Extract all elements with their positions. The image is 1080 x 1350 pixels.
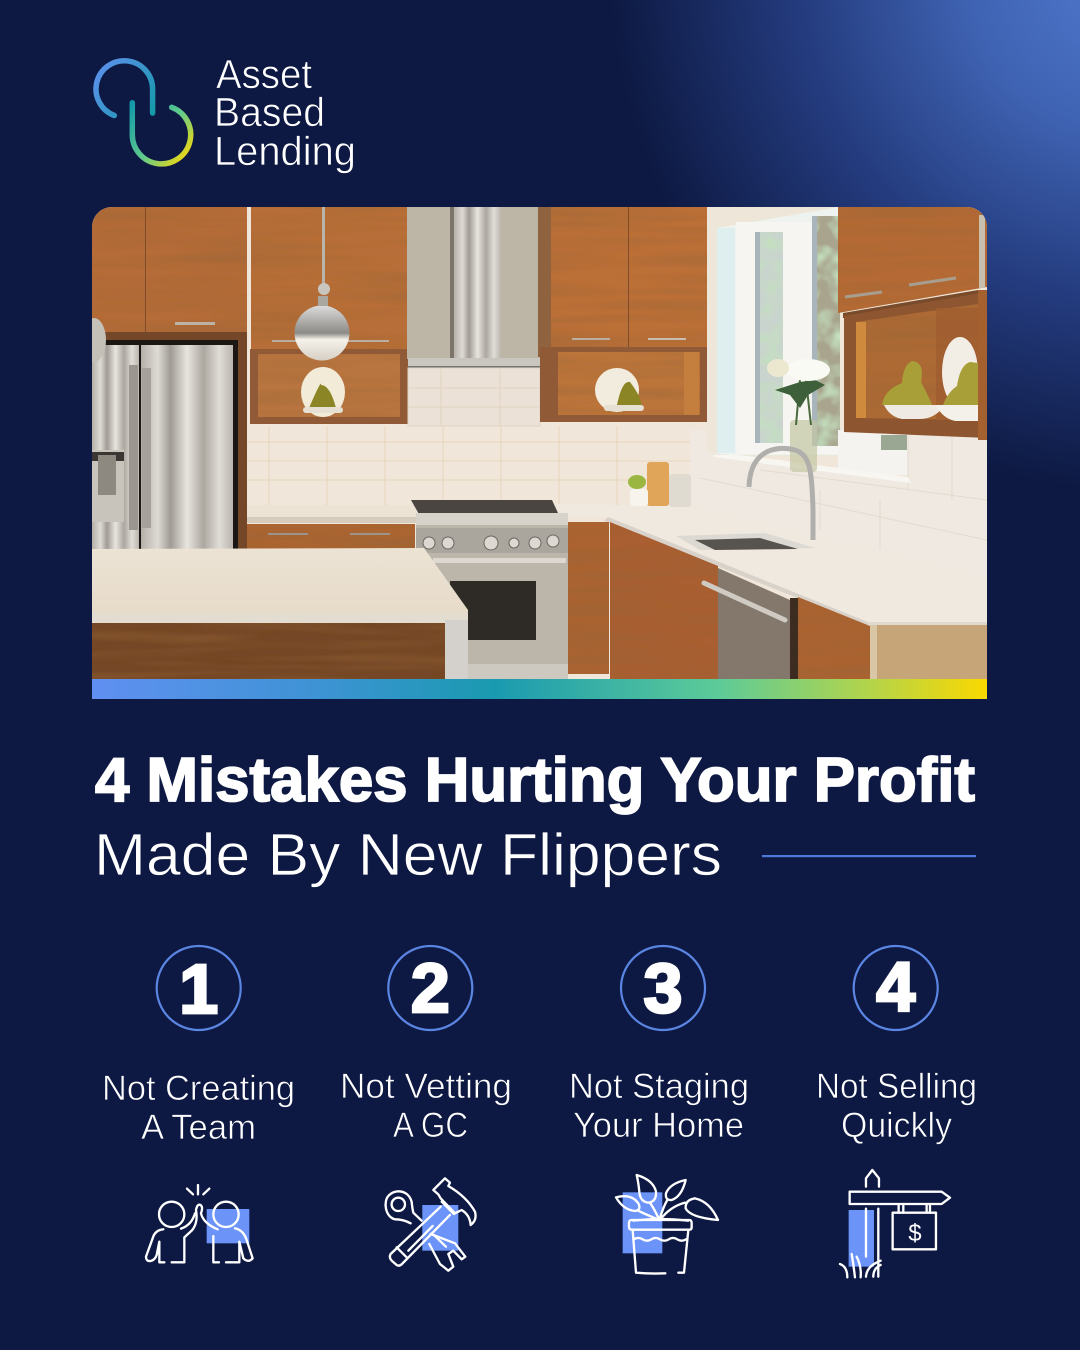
title line 1: 4 Mistakes Hurting Your Profit (95, 746, 975, 815)
label 2 (340, 1067, 512, 1145)
label 2: A GC (393, 1106, 468, 1145)
lower window pane (838, 430, 908, 475)
icon: potted plant (616, 1175, 718, 1274)
right niche (844, 290, 987, 440)
corner glow (560, 0, 1080, 520)
icon: tools (386, 1178, 476, 1271)
pendant light (294, 207, 350, 360)
icon: for-sale sign: $ (908, 1220, 922, 1247)
title line 2: Made By New Flippers (94, 822, 722, 888)
range hood (407, 207, 540, 368)
number 2: 2 (411, 949, 450, 1027)
logo wordmark: Asset (216, 51, 313, 97)
label 3: Your Home (573, 1106, 744, 1145)
oven range (411, 500, 568, 679)
icon: high five (146, 1185, 253, 1262)
title rule (762, 855, 976, 857)
window sill (714, 455, 911, 483)
label 1 (102, 1069, 295, 1147)
number 4: 4 (876, 948, 915, 1026)
logo mark (96, 61, 191, 164)
step 2 (340, 946, 512, 1271)
number 1 (157, 946, 241, 1030)
kitchen photo (82, 207, 987, 679)
wall and backsplash (92, 207, 987, 679)
jars and cup (628, 462, 691, 507)
centre upper cabinet (251, 207, 407, 350)
label 1: Not Creating (102, 1069, 295, 1108)
number 4 (854, 946, 938, 1030)
label 4: Not Selling (816, 1067, 977, 1106)
step 1 (102, 946, 295, 1262)
number 3: 3 (644, 949, 682, 1027)
lower left cabinet (247, 524, 415, 550)
right-centre niche (540, 347, 708, 422)
label 4 (816, 1067, 977, 1145)
label 2: Not Vetting (340, 1067, 512, 1106)
sink (676, 533, 815, 550)
right-centre upper cabinet (551, 207, 708, 349)
number 2 (388, 946, 472, 1030)
faucet (749, 448, 813, 540)
label 3 (569, 1067, 749, 1145)
logo wordmark: Lending (214, 128, 356, 174)
lower right cabinets (568, 522, 987, 679)
second pendant edge (92, 318, 106, 362)
left upper cabinets (92, 207, 247, 333)
flowers and vase (767, 359, 830, 472)
dishwasher (704, 568, 798, 679)
cabinet column beside hood (538, 207, 551, 357)
number 3 (621, 946, 705, 1030)
logo (96, 51, 356, 174)
kitchen island (92, 548, 468, 679)
right counter (558, 504, 560, 505)
title (94, 746, 975, 888)
hood tile (408, 368, 540, 426)
window (707, 207, 840, 457)
refrigerator (92, 332, 247, 550)
right upper cabinet (838, 207, 987, 318)
gradient bar (92, 679, 987, 699)
centre niche shelf (250, 349, 408, 424)
label 4: Quickly (841, 1106, 952, 1145)
label 1: A Team (141, 1108, 256, 1147)
step 4 (816, 946, 977, 1277)
logo wordmark: Based (214, 89, 325, 135)
number 1: 1 (179, 950, 218, 1028)
icon: for-sale sign (840, 1170, 950, 1277)
right backsplash (690, 442, 848, 480)
step 3 (569, 946, 749, 1274)
label 3: Not Staging (569, 1067, 749, 1106)
left counter (247, 517, 416, 523)
logo wordmark (214, 51, 356, 174)
